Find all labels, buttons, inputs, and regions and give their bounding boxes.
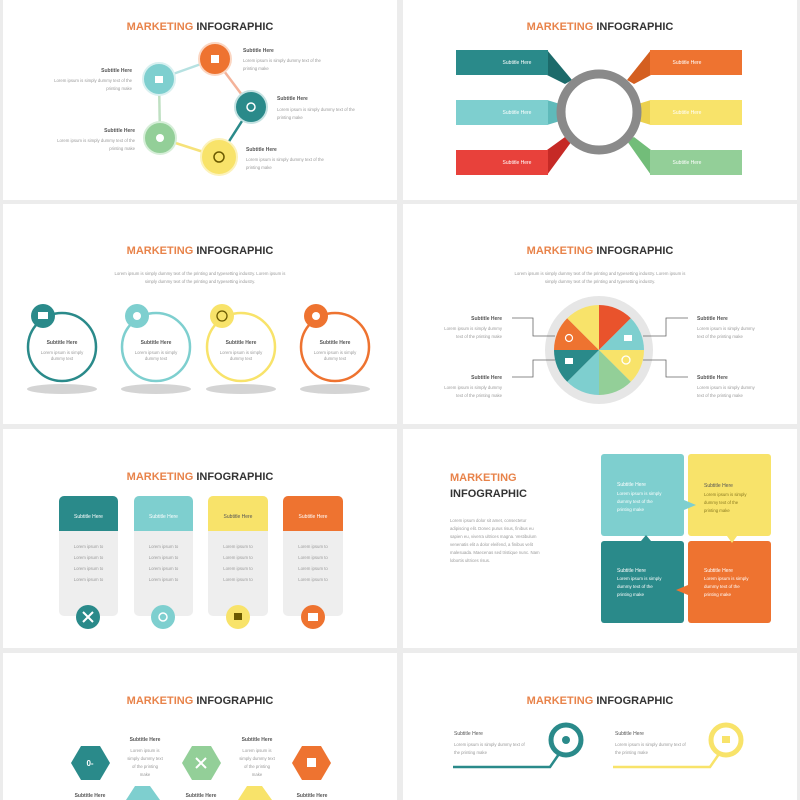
quadrants: printing make: [617, 592, 645, 597]
panel: slide 7 hexagons: simply dummy text: [239, 756, 276, 761]
text blocks: Subtitle Here: [104, 128, 135, 134]
quadrants: Subtitle Here: [617, 482, 646, 488]
paragraph: [450, 518, 540, 563]
bars: [456, 50, 742, 175]
panel: slide 8 ring timeline: the printing make: [615, 750, 649, 755]
text blocks: printing make: [243, 66, 269, 71]
panel: slide 6 four quadrants: INFOGRAPHIC: [450, 488, 527, 500]
paragraph: venenatis elit a dolor eleifend, a finibus velit: [450, 542, 534, 547]
cards: Lorem ipsum to: [74, 555, 104, 560]
text blocks: printing make: [106, 86, 133, 91]
quadrants: dummy text of the: [704, 584, 740, 589]
text blocks: Lorem ipsum is simply dummy text of the: [57, 138, 136, 143]
panel: slide 1 pentagon: [54, 21, 355, 175]
circles: Lorem ipsum is simply: [135, 350, 178, 355]
panel: slide 8 ring timeline: Subtitle Here: [454, 731, 483, 737]
panel: slide 4 pie chart: Subtitle Here: [471, 375, 502, 381]
intro text: Lorem ipsum is simply dummy text of the printing and typesetting industry. Lorem ipsum is: [515, 271, 685, 276]
cards: Lorem ipsum to: [149, 555, 179, 560]
panel: slide 4 pie chart: Subtitle Here: [697, 316, 728, 322]
circles: Subtitle Here: [47, 340, 78, 346]
panel: slide 4 pie chart: Subtitle Here: [697, 375, 728, 381]
cards: Lorem ipsum to: [298, 577, 328, 582]
circles: dummy text: [51, 356, 74, 361]
quadrants: Subtitle Here: [704, 483, 733, 489]
connectors: [512, 318, 688, 377]
cards: Lorem ipsum to: [223, 544, 253, 549]
quadrants: printing make: [704, 592, 732, 597]
panel: slide 4 pie chart: Lorem ipsum is simply dummy: [697, 326, 756, 331]
text blocks: Subtitle Here: [243, 48, 274, 54]
cards: Lorem ipsum to: [298, 566, 328, 571]
quadrants: Lorem ipsum is simply: [617, 491, 662, 496]
panel: slide 4 pie chart: Lorem ipsum is simply dummy: [444, 385, 503, 390]
panel: slide 8 ring timeline: the printing make: [454, 750, 488, 755]
bars: Subtitle Here: [673, 60, 702, 66]
title: MARKETING INFOGRAPHIC: [127, 471, 273, 483]
panel: slide 7 hexagons: Lorem ipsum is: [130, 748, 160, 753]
icon circles: [143, 43, 267, 175]
quadrants: Lorem ipsum is simply: [617, 576, 662, 581]
quadrants: dummy text of the: [704, 500, 739, 505]
panel: slide 8 ring timeline: [453, 695, 741, 767]
circles: Lorem ipsum is simply: [41, 350, 84, 355]
panel: slide 4 pie chart: Lorem ipsum is simply dummy: [697, 385, 756, 390]
panel: slide 8 ring timeline: Lorem ipsum is simply dummy text of: [615, 742, 686, 747]
cards: Lorem ipsum to: [149, 577, 179, 582]
text blocks: Subtitle Here: [101, 68, 132, 74]
cards: Lorem ipsum to: [74, 544, 104, 549]
cards: [59, 496, 343, 629]
panel: slide 7 hexagons: Subtitle Here: [130, 737, 161, 743]
title: MARKETING INFOGRAPHIC: [127, 245, 273, 257]
panel: slide 6 four quadrants: [450, 454, 771, 623]
title: MARKETING INFOGRAPHIC: [527, 695, 673, 707]
panel: slide 7 hexagons: Lorem ipsum is: [242, 748, 272, 753]
quadrants: dummy text of the: [617, 499, 653, 504]
bars: Subtitle Here: [673, 160, 702, 166]
text blocks: Lorem ipsum is simply dummy text of the: [243, 58, 321, 63]
text blocks: printing make: [246, 165, 272, 170]
cards: Lorem ipsum to: [298, 544, 328, 549]
quadrants: printing make: [704, 508, 730, 513]
circles: dummy text: [324, 356, 347, 361]
panel: slide 3 four circles: [27, 245, 370, 394]
cards: Subtitle Here: [74, 514, 103, 520]
panel: slide 7 hexagons: of the printing: [244, 764, 271, 769]
cards: Lorem ipsum to: [223, 555, 253, 560]
gray ring: [561, 74, 637, 150]
circles: dummy text: [230, 356, 253, 361]
panel: slide 4 pie chart: text of the printing make: [697, 334, 743, 339]
intro text: Lorem ipsum is simply dummy text of the printing and typesetting industry. Lorem ipsum is: [115, 271, 285, 276]
cards: Lorem ipsum to: [223, 577, 253, 582]
cards: Lorem ipsum to: [298, 555, 328, 560]
panel: slide 2 ring with bars: [456, 21, 742, 175]
text blocks: Subtitle Here: [277, 96, 308, 102]
quadrants: printing make: [617, 507, 645, 512]
panel: slide 4 pie chart: Lorem ipsum is simply dummy: [444, 326, 503, 331]
circles: [27, 304, 370, 394]
text blocks: Lorem ipsum is simply dummy text of the: [54, 78, 133, 83]
panel: slide 3 four circles: simply dummy text of the printing and typesetting industry.: [145, 279, 255, 284]
panel: slide 5 cards: [59, 471, 343, 629]
paragraph: adipiscing elit. Donec purus risus, finibus eu: [450, 526, 534, 531]
cards: Lorem ipsum to: [74, 566, 104, 571]
hexagons: 0-: [86, 759, 94, 768]
panel: slide 7 hexagons: make: [252, 772, 263, 777]
quadrants: Subtitle Here: [704, 568, 733, 574]
panel: slide 4 pie chart: text of the printing make: [456, 334, 503, 339]
paragraph: Lorem ipsum dolor sit amet, consectetur: [450, 518, 527, 523]
hexagons: [71, 746, 331, 800]
panel: slide 4 pie chart: [444, 245, 756, 404]
panel: slide 7 hexagons: simply dummy text: [127, 756, 164, 761]
bars: Subtitle Here: [503, 60, 532, 66]
circles: Subtitle Here: [320, 340, 351, 346]
panel: slide 7 hexagons: Subtitle Here: [242, 737, 273, 743]
quadrants: Lorem ipsum is simply: [704, 576, 749, 581]
cards: Lorem ipsum to: [149, 566, 179, 571]
paragraph: malesuada. Maecenas sed tristique nunc. Nam: [450, 550, 540, 555]
text blocks: printing make: [277, 115, 303, 120]
panel: slide 7 hexagons: Subtitle Here: [75, 793, 106, 799]
text blocks: Subtitle Here: [246, 147, 277, 153]
paragraph: sapien eu, viverra ultrices magna. Vestibulum: [450, 534, 537, 539]
cards: Lorem ipsum to: [223, 566, 253, 571]
pie chart: [545, 296, 653, 404]
circles: Subtitle Here: [226, 340, 257, 346]
paragraph: lobortis ultrices risus.: [450, 558, 490, 563]
panel: slide 7 hexagons: make: [140, 772, 151, 777]
panel: slide 4 pie chart: simply dummy text of the printing and typesetting industry.: [545, 279, 655, 284]
text blocks: [54, 48, 355, 170]
text blocks: Lorem ipsum is simply dummy text of the: [246, 157, 324, 162]
panel: slide 7 hexagons: Subtitle Here: [186, 793, 217, 799]
quadrants: Lorem ipsum is simply: [704, 492, 747, 497]
panel: slide 4 pie chart: text of the printing make: [456, 393, 503, 398]
panel: slide 8 ring timeline: Subtitle Here: [615, 731, 644, 737]
bars: Subtitle Here: [503, 160, 532, 166]
title: MARKETING: [450, 472, 517, 484]
panel: slide 8 ring timeline: Lorem ipsum is simply dummy text of: [454, 742, 525, 747]
circles: dummy text: [145, 356, 168, 361]
panel: slide 7 hexagons: Subtitle Here: [297, 793, 328, 799]
bars: Subtitle Here: [673, 110, 702, 116]
cards: Subtitle Here: [299, 514, 328, 520]
cards: Lorem ipsum to: [74, 577, 104, 582]
circles: Lorem ipsum is simply: [314, 350, 357, 355]
panel: slide 7 hexagons: [71, 695, 331, 800]
cards: Subtitle Here: [149, 514, 178, 520]
title: MARKETING INFOGRAPHIC: [127, 695, 273, 707]
circles: Subtitle Here: [141, 340, 172, 346]
panel: slide 7 hexagons: of the printing: [132, 764, 159, 769]
bars: Subtitle Here: [503, 110, 532, 116]
title: MARKETING INFOGRAPHIC: [127, 21, 273, 33]
quadrants: dummy text of the: [617, 584, 653, 589]
quadrants: [601, 454, 771, 623]
title: MARKETING INFOGRAPHIC: [527, 21, 673, 33]
cards: Subtitle Here: [224, 514, 253, 520]
text blocks: Lorem ipsum is simply dummy text of the: [277, 107, 355, 112]
title: MARKETING INFOGRAPHIC: [527, 245, 673, 257]
panel: slide 4 pie chart: text of the printing make: [697, 393, 743, 398]
circles: Lorem ipsum is simply: [220, 350, 263, 355]
quadrants: Subtitle Here: [617, 568, 646, 574]
panel: slide 4 pie chart: Subtitle Here: [471, 316, 502, 322]
cards: Lorem ipsum to: [149, 544, 179, 549]
text blocks: printing make: [109, 146, 136, 151]
